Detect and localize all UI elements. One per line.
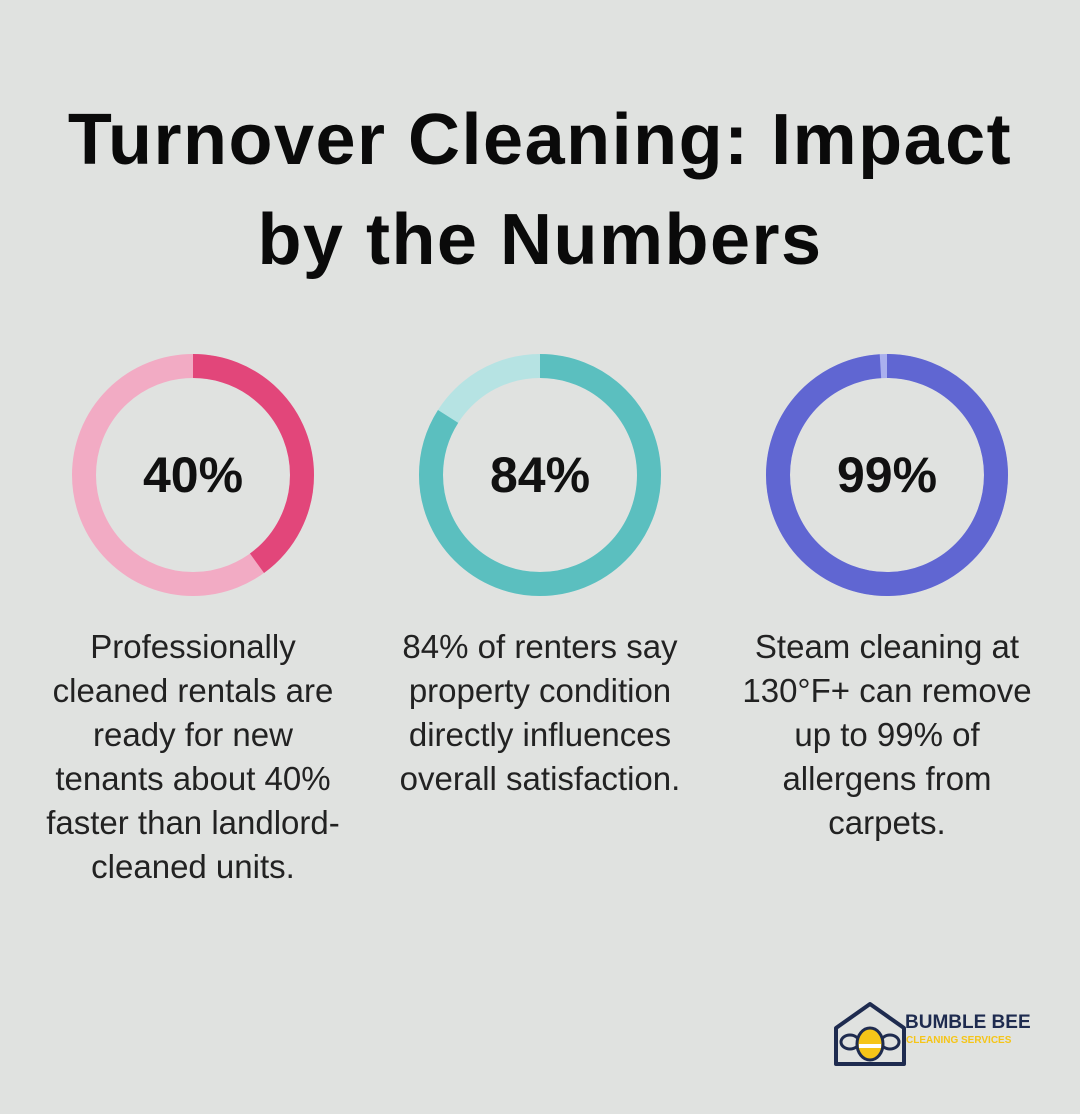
text: stat 1: cleaned rentals are (53, 672, 333, 709)
ring: 40% (72, 354, 314, 596)
logo (834, 1002, 1031, 1066)
text: stat 3: allergens from (782, 760, 992, 797)
text: stat 3 (742, 628, 1032, 841)
text: stat 2: 84% of renters say (402, 628, 678, 665)
text: stat 2: overall satisfaction. (400, 760, 680, 797)
text: stat 2: property condition (409, 672, 671, 709)
ring: 99%: 99% (837, 447, 937, 503)
text: stat 3: up to 99% of (794, 716, 980, 753)
text: stat 1: cleaned units. (91, 848, 295, 885)
text: stat 2 (400, 628, 680, 797)
title (68, 100, 1012, 280)
text: stat 2: directly influences (409, 716, 671, 753)
ring: 84%: 84% (490, 447, 590, 503)
title: Turnover Cleaning: Impact (68, 100, 1012, 180)
text: stat 1: faster than landlord- (46, 804, 340, 841)
text: stat 3: 130°F+ can remove (742, 672, 1032, 709)
text: stat 1: ready for new (93, 716, 293, 753)
text: stat 1: tenants about 40% (55, 760, 331, 797)
title: by the Numbers (257, 200, 823, 280)
ring: 99% (766, 354, 1008, 596)
text: stat 1: Professionally (90, 628, 296, 665)
text: stat 3: Steam cleaning at (755, 628, 1019, 665)
text: stat 1 (46, 628, 340, 885)
logo: BUMBLE BEE (905, 1012, 1031, 1033)
logo: CLEANING SERVICES (906, 1035, 1011, 1046)
ring: 40%: 40% (143, 447, 243, 503)
text: stat 3: carpets. (828, 804, 946, 841)
ring: 84% (419, 354, 661, 596)
